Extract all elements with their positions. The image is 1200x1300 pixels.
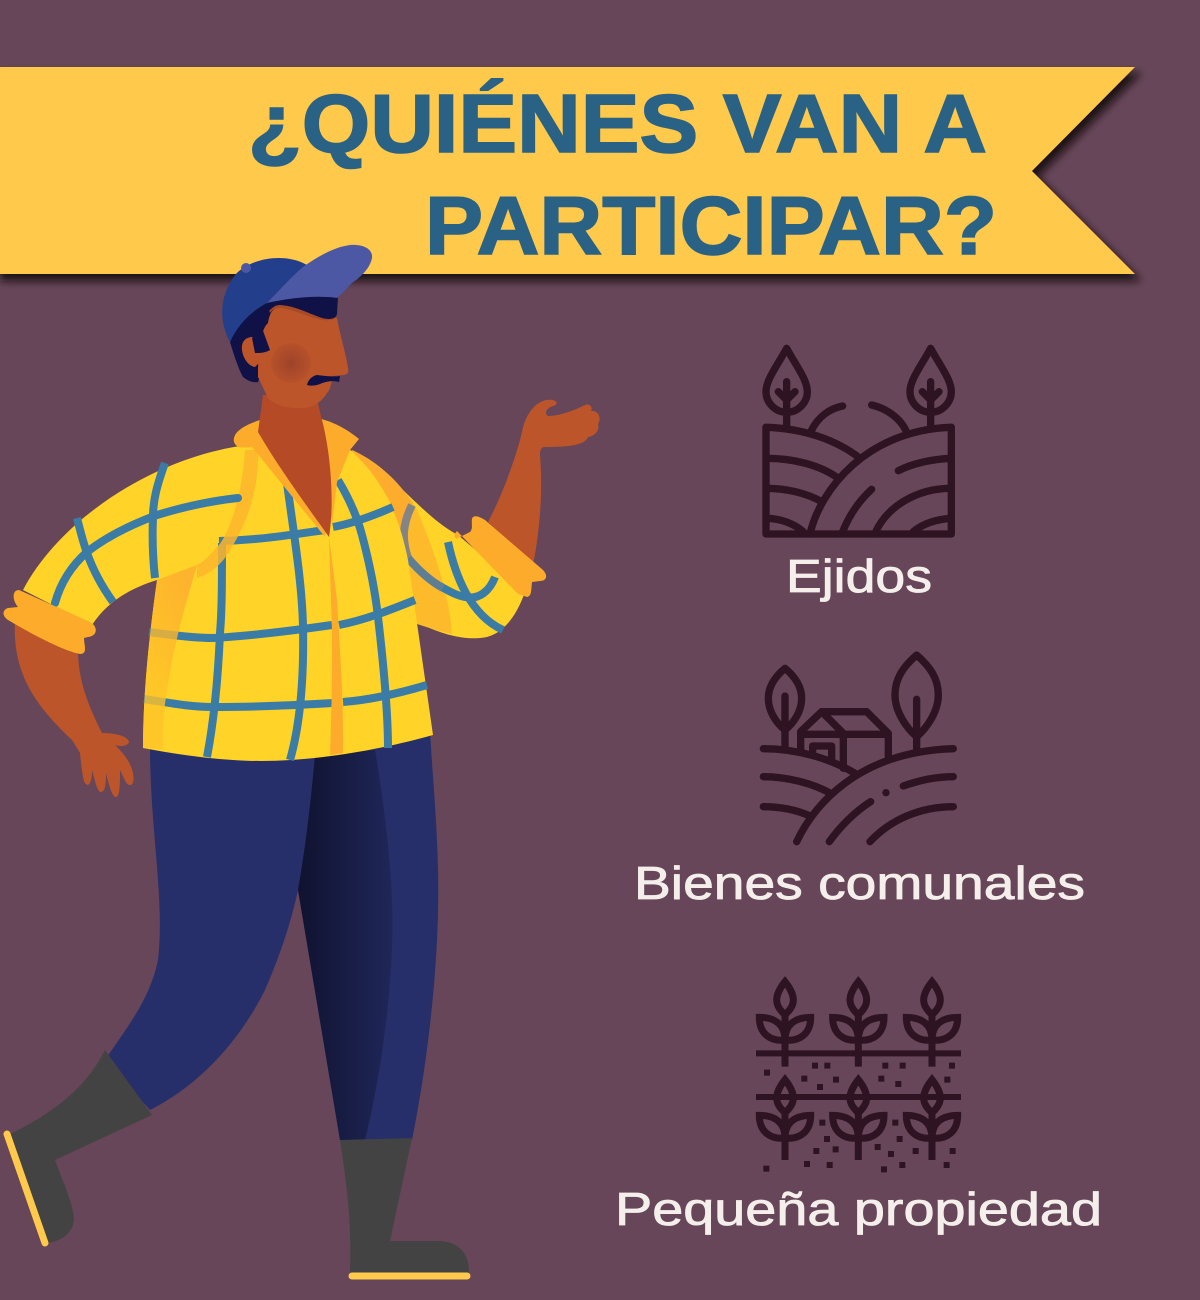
farmer figure	[4, 245, 600, 1276]
trousers	[105, 730, 438, 1140]
collar	[234, 418, 359, 537]
right forearm and hand	[488, 400, 600, 565]
head	[222, 245, 372, 408]
left boot	[7, 1050, 152, 1243]
icon: bienes comunales farmhouse	[763, 655, 953, 842]
hair back	[230, 302, 285, 382]
label: bienes comunales: Bienes comunales	[634, 857, 1085, 909]
title: ¿QUIÉNES VAN A	[248, 77, 987, 170]
face	[258, 308, 348, 408]
cap crown	[222, 258, 307, 342]
front hair	[267, 297, 338, 320]
mustache	[307, 375, 340, 386]
banner ribbon	[0, 67, 1141, 281]
label: pequeña propiedad: Pequeña propiedad	[615, 1183, 1102, 1235]
left forearm and hand	[15, 620, 134, 797]
title: PARTICIPAR?	[425, 179, 997, 272]
underarm shading	[143, 565, 197, 749]
right boot	[340, 1138, 469, 1276]
sideburn	[252, 328, 270, 353]
cheek	[271, 343, 311, 383]
left cuff	[4, 590, 96, 654]
sleeve seam	[197, 450, 258, 578]
right sleeve	[350, 450, 546, 638]
cap brim	[267, 245, 372, 303]
label: ejidos: Ejidos	[786, 550, 932, 602]
neck	[258, 395, 332, 537]
icon: pequeña propiedad crops	[756, 982, 961, 1172]
ear	[242, 337, 262, 367]
cap button	[241, 263, 251, 273]
title	[248, 77, 997, 272]
shirt	[4, 446, 433, 761]
plaid lines	[144, 468, 427, 760]
icon: ejidos fields and trees	[766, 348, 951, 534]
placket	[329, 537, 343, 755]
sleeve plaid	[55, 463, 238, 603]
